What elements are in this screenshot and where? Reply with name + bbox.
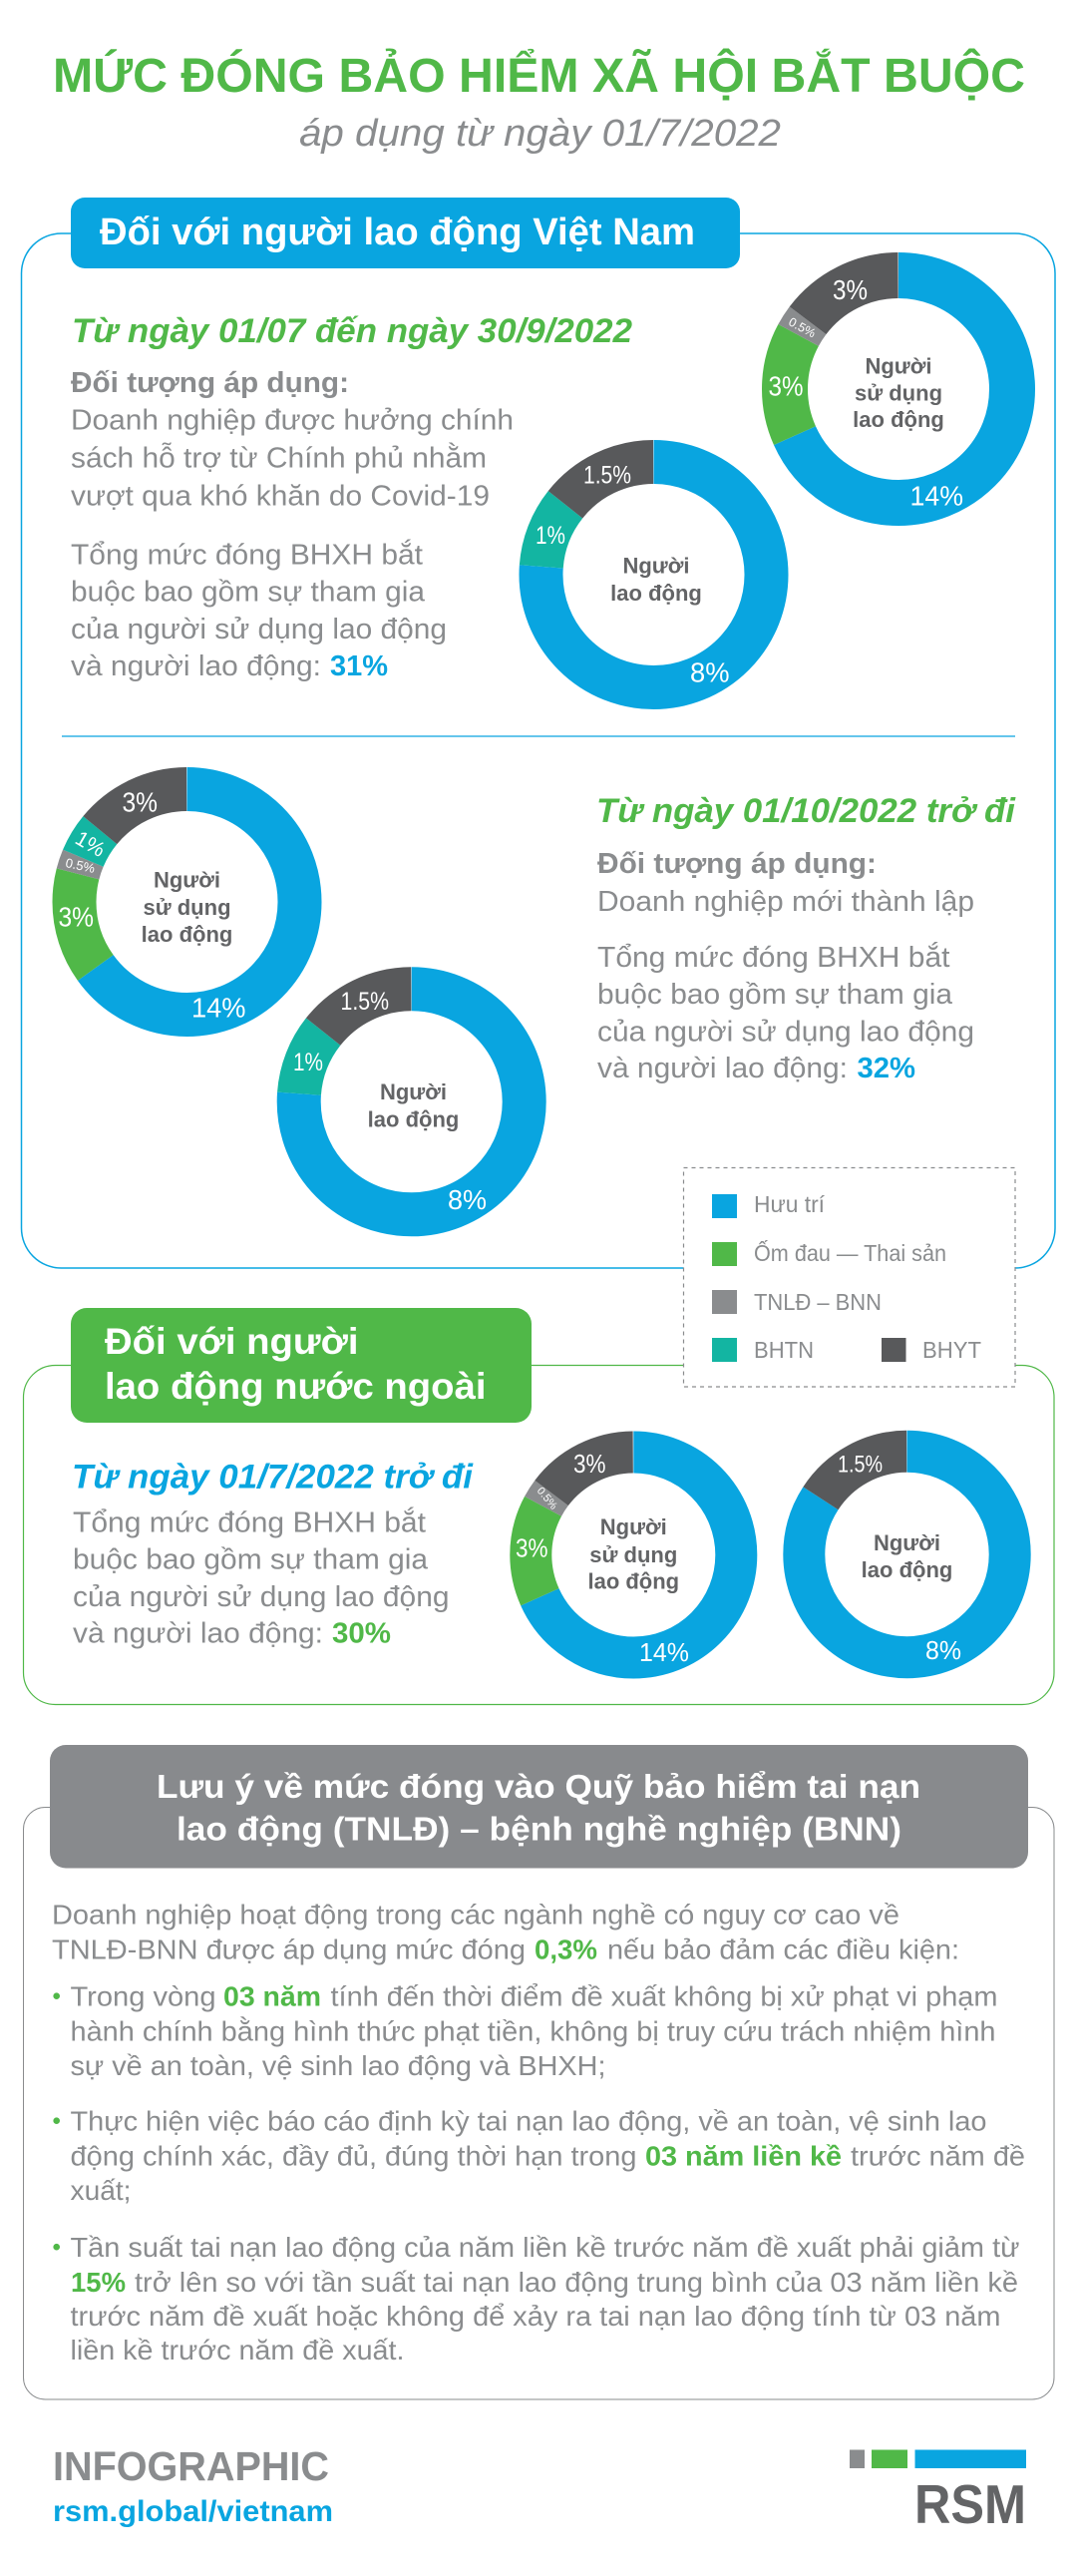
bullet 2: 03 năm liền kề — [645, 2141, 842, 2171]
heading tab: notes: lao động (TNLĐ) – bệnh nghề nghiệp (BNN) — [177, 1810, 901, 1848]
text block: period 1: sách hỗ trợ từ Chính phủ nhằm — [71, 441, 487, 475]
bullet 3: liền kề trước năm đề xuất. — [70, 2335, 405, 2365]
donut: employer, period 2: Người — [154, 868, 220, 892]
donut: employee, period 2: 8% — [448, 1184, 487, 1215]
text block: period 2 — [596, 792, 1017, 1084]
legend item: sickness and maternity: Ốm đau — Thai sản — [754, 1239, 946, 1266]
text block: period 1: Tổng mức đóng BHXH bắt — [71, 539, 423, 571]
subtitle: áp dụng từ ngày 01/7/2022 — [299, 113, 781, 155]
text block: period 1: Doanh nghiệp được hưởng chính — [71, 405, 514, 437]
text block: intro: TNLĐ-BNN được áp dụng mức đóng — [52, 1933, 526, 1965]
text block: period 1: Từ ngày 01/07 đến ngày 30/9/2022 — [72, 312, 632, 350]
text block: period 1: vượt qua khó khăn do Covid-19 — [71, 481, 490, 513]
donut: employer, period 2: sử dụng — [143, 895, 231, 920]
donut: employer, foreign: Người — [600, 1514, 667, 1539]
title: MỨC ĐÓNG BẢO HIỂM XÃ HỘI BẮT BUỘC — [53, 48, 1025, 103]
donut: employer, period 1: Người — [865, 353, 932, 379]
heading tab: Vietnamese workers: Đối với người lao động Việt Nam — [100, 212, 695, 253]
donut: employee, period 1: 1% — [536, 522, 565, 550]
text block: period 1: Đối tượng áp dụng: — [71, 367, 349, 399]
text block: period 2: Doanh nghiệp mới thành lập — [597, 886, 974, 918]
donut: employer, period 2 — [58, 786, 299, 1024]
legend item: unemployment insurance: BHTN — [754, 1337, 814, 1363]
donut: employer, period 2: 3% — [122, 786, 158, 818]
bullet 2 — [53, 2105, 1025, 2206]
text block: period 2: của người sử dụng lao động — [597, 1016, 974, 1048]
heading tab: notes: Lưu ý về mức đóng vào Quỹ bảo hiểm tai nạn — [157, 1768, 920, 1805]
heading tab: foreign workers — [71, 1308, 532, 1423]
donut: employee, foreign — [804, 1451, 1010, 1665]
donut: employee, foreign: 1.5% — [838, 1451, 883, 1479]
heading tab: foreign workers: lao động nước ngoài — [105, 1366, 487, 1407]
bullet 1 — [53, 1981, 997, 2081]
bullet 2: Thực hiện việc báo cáo định kỳ tai nạn lao động, về an toàn, vệ sinh lao — [70, 2105, 987, 2137]
donut: employer, period 1: sử dụng — [855, 381, 942, 405]
donut: employer, period 1: 0.5% — [787, 315, 818, 340]
donut: employer, period 1: 14% — [909, 481, 963, 511]
legend item: health insurance: BHYT — [922, 1337, 981, 1363]
donut: employer, foreign: lao động — [587, 1568, 679, 1594]
text block: period 2: buộc bao gồm sự tham gia — [597, 979, 953, 1011]
donut: employee, period 1: 1.5% — [583, 461, 631, 489]
text block: foreign workers: 30% — [332, 1618, 391, 1650]
footer: website: rsm.global/vietnam — [53, 2495, 333, 2528]
donut: employer, period 2: 0.5% — [64, 855, 97, 876]
donut: employee, period 2: lao động — [368, 1107, 459, 1131]
donut: employer, foreign: 3% — [573, 1449, 606, 1479]
text block: period 1 — [71, 312, 632, 682]
heading tab: Vietnamese workers — [71, 198, 740, 268]
donut: employer, foreign: 3% — [516, 1532, 548, 1562]
text block: foreign workers: buộc bao gồm sự tham gia — [73, 1544, 429, 1576]
donut: employer, period 2: 14% — [191, 992, 245, 1024]
donut: employer, foreign: 14% — [639, 1637, 689, 1667]
text block: foreign workers: và người lao động: — [73, 1618, 323, 1650]
heading tab: notes — [50, 1745, 1028, 1868]
text block: foreign workers: Tổng mức đóng BHXH bắt — [73, 1506, 426, 1538]
donut: employer, period 2: lao động — [142, 922, 232, 947]
legend item: pension: Hưu trí — [754, 1191, 826, 1217]
bullet 3: trước năm đề xuất hoặc không để xảy ra tai nạn lao động tính từ 03 năm — [70, 2301, 1001, 2332]
legend item: occupational accident: TNLĐ – BNN — [754, 1289, 882, 1315]
donut: employee, period 2: Người — [380, 1079, 447, 1104]
bullet 3: Tần suất tai nạn lao động của năm liền kề trước năm đề xuất phải giảm từ — [70, 2232, 1020, 2263]
bullet 2: động chính xác, đầy đủ, đúng thời hạn trong — [70, 2141, 636, 2171]
heading tab: foreign workers: Đối với người — [105, 1321, 359, 1362]
text block: period 2: Từ ngày 01/10/2022 trở đi — [596, 792, 1017, 830]
donut: employer, foreign — [516, 1449, 736, 1667]
bullet 3 — [53, 2232, 1020, 2365]
panel: notes on occupational accident fund — [24, 1745, 1054, 2399]
donut: employee, period 2: 1.5% — [341, 988, 389, 1016]
donut: employee, period 2: 1% — [293, 1049, 323, 1076]
logo: RSM — [850, 2450, 1026, 2535]
logo: RSM: RSM — [914, 2473, 1026, 2535]
text block: intro — [52, 1900, 959, 1965]
bullet 1: hành chính bằng hình thức phạt tiền, không bị truy cứu trách nhiệm hình — [70, 2015, 995, 2047]
bullet 3: 15% — [71, 2267, 126, 2298]
donut: employee, period 1: Người — [622, 553, 690, 579]
donut: employee, foreign: 8% — [925, 1635, 961, 1665]
bullet 1: 03 năm — [223, 1981, 321, 2011]
donut: employer, period 1: lao động — [853, 407, 944, 432]
donut: employer, period 1 — [768, 274, 1012, 511]
bullet 2: trước năm đề — [851, 2141, 1025, 2171]
bullet 1: sự về an toàn, vệ sinh lao động và BHXH; — [70, 2050, 606, 2081]
donut: employer, period 2: 3% — [58, 902, 94, 932]
text block: intro: nếu bảo đảm các điều kiện: — [607, 1933, 959, 1965]
donut: employee, foreign: Người — [874, 1530, 940, 1555]
text block: period 1: 31% — [330, 650, 388, 682]
text block: intro: Doanh nghiệp hoạt động trong các ngành nghề có nguy cơ cao về — [52, 1900, 899, 1930]
donut: employee, period 1: lao động — [610, 581, 702, 606]
donut: employee, period 1 — [536, 461, 766, 688]
text block: period 2: Tổng mức đóng BHXH bắt — [597, 941, 949, 974]
donut: employer, foreign: sử dụng — [589, 1542, 677, 1567]
panel: Vietnamese workers — [22, 198, 1055, 1268]
donut: employee, period 2 — [293, 988, 525, 1215]
panel: foreign workers — [24, 1308, 1054, 1704]
donut: employer, period 1: 3% — [768, 371, 804, 401]
text block: foreign workers: của người sử dụng lao động — [73, 1581, 449, 1613]
text block: period 2: và người lao động: — [597, 1053, 848, 1084]
bullet 1: tính đến thời điểm đề xuất không bị xử phạt vi phạm — [331, 1981, 997, 2011]
legend — [684, 1167, 1015, 1387]
footer: infographic label: INFOGRAPHIC — [53, 2443, 329, 2489]
bullet 1: Trong vòng — [70, 1981, 215, 2011]
donut: employee, period 1: 8% — [690, 656, 730, 688]
text block: period 1: của người sử dụng lao động — [71, 614, 447, 645]
text block: foreign workers: Từ ngày 01/7/2022 trở đi — [72, 1459, 475, 1497]
text block: period 2: Đối tượng áp dụng: — [597, 848, 877, 880]
text block: period 2: 32% — [858, 1053, 915, 1084]
text block: foreign workers — [72, 1459, 475, 1650]
text block: period 1: và người lao động: — [71, 650, 321, 682]
donut: employee, foreign: lao động — [862, 1557, 952, 1582]
donut: employer, period 1: 3% — [833, 274, 868, 305]
bullet 3: trở lên so với tần suất tai nạn lao động trung bình của 03 năm liền kề — [135, 2267, 1018, 2298]
bullet 2: xuất; — [70, 2175, 132, 2206]
legend item: pension — [712, 1191, 826, 1218]
legend item: health insurance — [882, 1337, 981, 1363]
legend item: unemployment insurance — [712, 1337, 814, 1363]
text block: intro: 0,3% — [535, 1933, 597, 1965]
donut: employer, foreign: 0.5% — [535, 1486, 559, 1512]
text block: period 1: buộc bao gồm sự tham gia — [71, 577, 426, 609]
donut: employer, period 2: 1% — [71, 827, 109, 862]
